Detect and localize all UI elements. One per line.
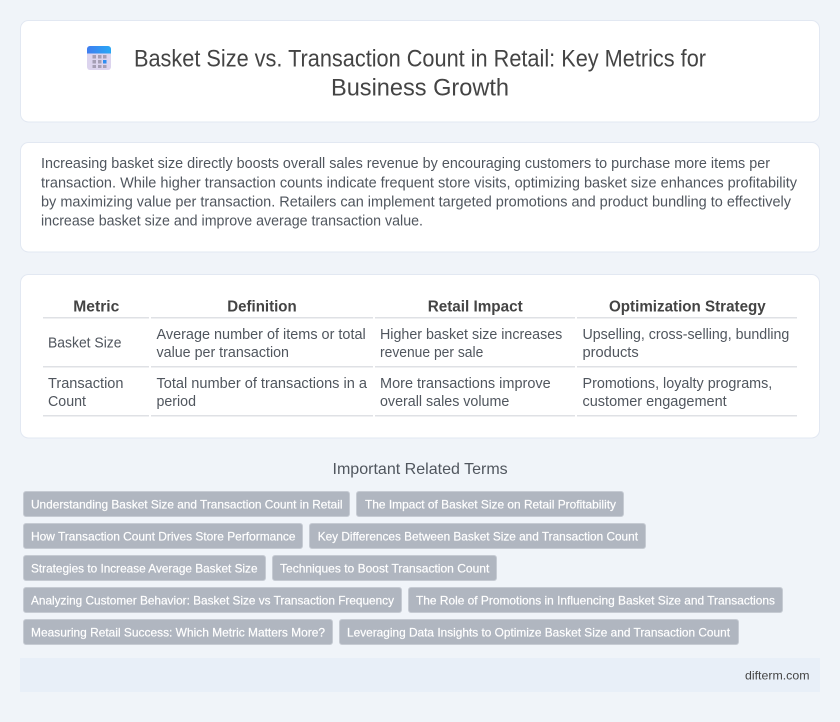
table row: Basket Size: Higher basket size increases [380,327,562,343]
chip: Understanding Basket Size and Transaction Count in Retail [31,497,342,511]
panel: intro text: increase basket size and improve average transaction value. [41,214,423,230]
table row: Basket Size: value per transaction [156,345,289,361]
chip [24,556,266,580]
table header: Definition [227,299,297,316]
table row: Basket Size: revenue per sale [380,345,483,361]
panel: intro text: Increasing basket size directly boosts overall sales revenue by encouraging customers to purchase more items per [41,156,770,172]
panel: header [20,20,820,122]
panel: metrics table [20,274,820,438]
table header [73,299,766,316]
chip [24,620,332,644]
chip: The Impact of Basket Size on Retail Profitability [365,497,616,511]
related term chips [24,492,782,644]
title: Basket Size vs. Transaction Count in Retail: Key Metrics for [134,46,706,72]
chip [24,524,302,548]
table row: Basket Size: Average number of items or total [156,327,366,343]
table row: Transaction Count: period [156,394,196,410]
chip [356,492,624,516]
footer: difterm.com [745,668,810,682]
table row: Transaction Count: Promotions, loyalty programs, [582,376,772,392]
chip: Techniques to Boost Transaction Count [280,561,490,575]
chip: Measuring Retail Success: Which Metric Matters More? [31,625,325,639]
table row: Transaction Count: customer engagement [582,394,727,410]
table row: Basket Size: Basket Size [48,336,122,352]
table header: Optimization Strategy [609,299,766,316]
title [134,46,706,102]
table row: Transaction Count: Transaction [48,376,124,392]
table row: Basket Size [48,327,789,361]
chip [310,524,646,548]
table row: Transaction Count: Count [48,394,86,410]
table header: Retail Impact [428,299,523,316]
table row: Transaction Count: More transactions improve [380,376,551,392]
chip: How Transaction Count Drives Store Performance [31,529,296,543]
chip [24,588,402,612]
table row: Transaction Count: Total number of transactions in a [156,376,367,392]
chip: Strategies to Increase Average Basket Size [31,561,258,575]
table header: Metric [73,299,119,316]
title: Business Growth [331,74,509,102]
chip [408,588,782,612]
panel: intro text [20,142,820,252]
chip: Leveraging Data Insights to Optimize Basket Size and Transaction Count [347,625,731,639]
table row: Basket Size: products [582,345,639,361]
footer [20,658,820,692]
chip: The Role of Promotions in Influencing Basket Size and Transactions [416,593,775,607]
panel: intro text: by maximizing value per transaction. Retailers can implement targeted promotions and product bundling to effectively [41,194,792,210]
table row: Transaction Count [48,376,772,410]
chip [24,492,350,516]
chip [340,620,738,644]
table row: Basket Size: Upselling, cross-selling, bundling [582,327,789,343]
chip [272,556,496,580]
heading: related terms: Important Related Terms [332,461,508,478]
icon: calendar [87,46,111,70]
panel: intro text: transaction. While higher transaction counts indicate frequent store visits, optimizing basket size enhances profitability [41,175,798,191]
chip: Key Differences Between Basket Size and Transaction Count [318,529,639,543]
chip: Analyzing Customer Behavior: Basket Size vs Transaction Frequency [31,593,394,607]
table row: Transaction Count: overall sales volume [380,394,509,410]
